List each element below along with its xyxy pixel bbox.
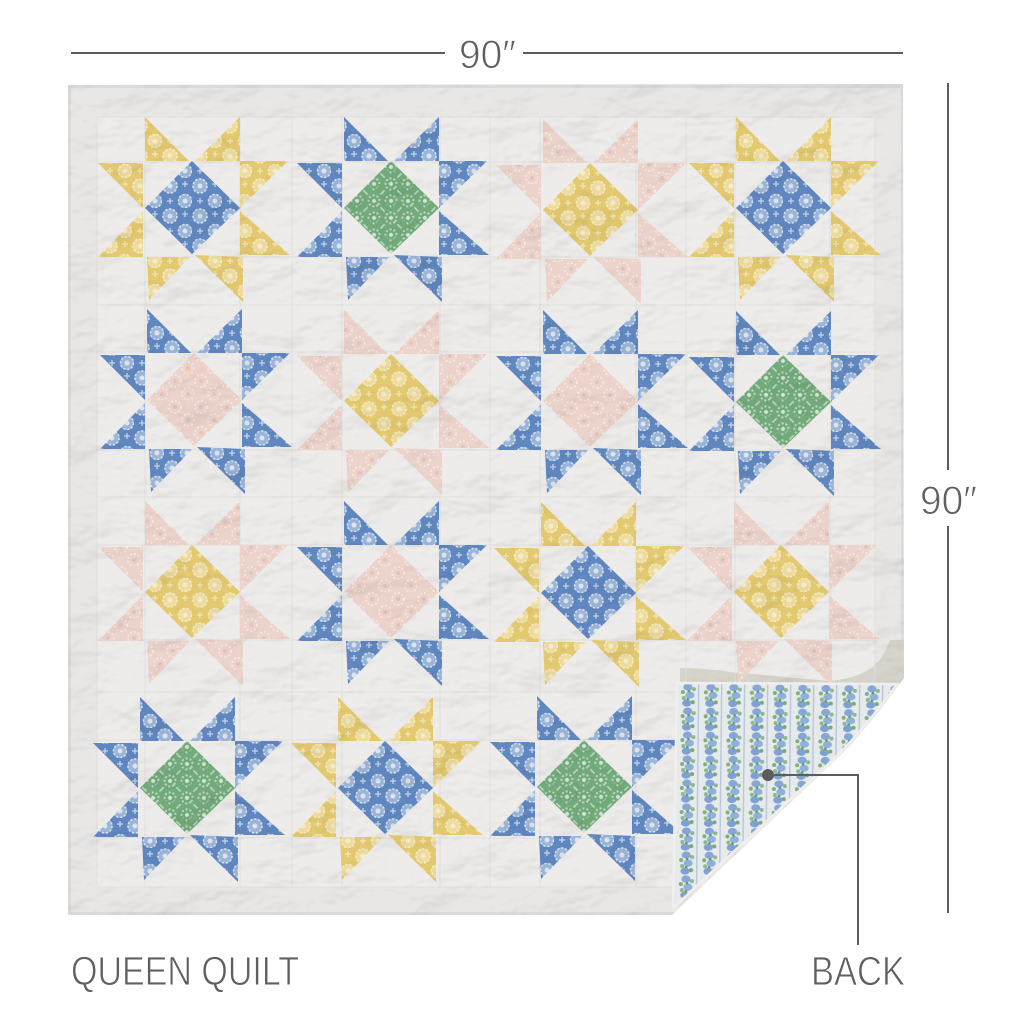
folded corner: quilt back fabric [673,683,897,908]
fabric wrinkle texture [68,84,906,916]
row 1 star 3: pink star, yellow diamond [496,119,688,304]
row 4 star 1: blue star, green diamond [93,697,285,882]
row 1 star 4: yellow star, blue diamond [689,117,881,302]
quilt [66,82,908,918]
label: queen quilt: QUEEN QUILT [71,948,299,994]
quilt border fabric [71,88,901,912]
row 4 star 3: blue star, green diamond [490,696,682,881]
row 1 star 2: blue star, green diamond [297,117,489,302]
row 2 star 4: blue star, green diamond [689,311,881,496]
dimension: width 90 inches: 90″ [459,33,516,77]
callout: back [762,769,858,945]
row 2 star 2: pink star, yellow diamond [297,310,489,495]
label: back: BACK [811,948,905,994]
row 3 star 4: pink star, yellow diamond [687,501,879,686]
row 1 star 1: yellow star, blue diamond [98,117,290,302]
row 3 star 2: blue star, pink diamond [297,501,489,686]
row 3 star 3: yellow star, blue diamond [494,502,686,687]
row 3 star 1: pink star, yellow diamond [98,501,290,686]
dimension: height 90 inches: 90″ [920,479,977,523]
row 2 star 3: blue star, pink diamond [496,310,688,495]
row 2 star 1: blue star, pink diamond [100,309,292,494]
row 4 star 2: yellow star, blue diamond [291,697,483,882]
fold shadow [680,640,904,684]
quilt base fabric [66,82,908,918]
quilt inner field [97,117,875,887]
block seams [97,117,875,887]
